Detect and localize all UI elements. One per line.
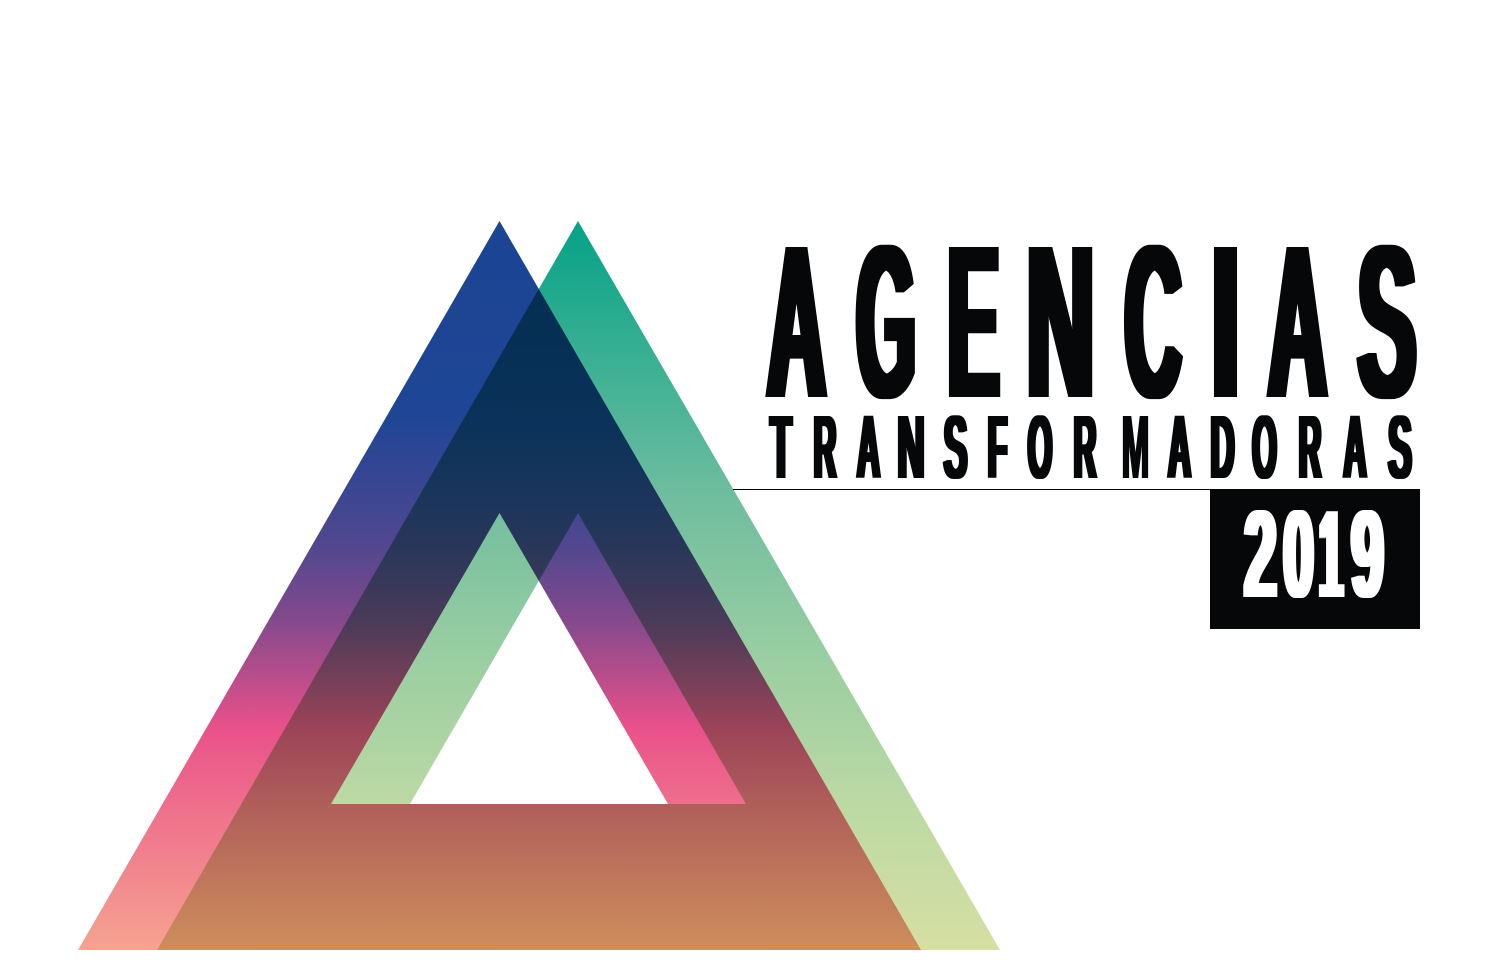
- title: AGENCIAS: E: [948, 200, 999, 444]
- subtitle: TRANSFORMADORAS: A: [857, 398, 880, 498]
- triangle: blue to pink gradient: [78, 221, 921, 950]
- subtitle: TRANSFORMADORAS: R: [814, 398, 836, 498]
- year: 2019: 0: [1283, 485, 1314, 624]
- subtitle: TRANSFORMADORAS: O: [1252, 398, 1277, 498]
- subtitle: TRANSFORMADORAS: [770, 396, 1412, 498]
- title: AGENCIAS: G: [856, 199, 916, 444]
- year badge: [1210, 484, 1420, 629]
- logo: overlapping triangles: [78, 221, 1000, 950]
- title: AGENCIAS: S: [1358, 202, 1416, 444]
- subtitle: TRANSFORMADORAS: O: [1028, 398, 1052, 498]
- year: 2019: 1: [1319, 485, 1343, 624]
- badge background: [1210, 489, 1420, 629]
- subtitle: TRANSFORMADORAS: S: [1388, 396, 1412, 498]
- title: AGENCIAS: N: [1026, 200, 1095, 444]
- subtitle: TRANSFORMADORAS: S: [944, 396, 967, 498]
- subtitle: TRANSFORMADORAS: N: [897, 397, 925, 498]
- subtitle: TRANSFORMADORAS: A: [1168, 398, 1191, 498]
- triangle: green gradient: [157, 221, 1000, 950]
- subtitle: TRANSFORMADORAS: F: [988, 398, 1007, 498]
- year: 2019: [1244, 484, 1384, 624]
- title: AGENCIAS: A: [767, 200, 826, 443]
- divider line: [733, 489, 1210, 490]
- title: AGENCIAS: C: [1125, 200, 1181, 444]
- title: AGENCIAS: A: [1268, 200, 1327, 443]
- subtitle: TRANSFORMADORAS: D: [1210, 398, 1235, 498]
- subtitle: TRANSFORMADORAS: T: [770, 398, 792, 498]
- year: 2019: 2: [1244, 484, 1277, 624]
- title: AGENCIAS: I: [1211, 201, 1240, 444]
- subtitle: TRANSFORMADORAS: R: [1299, 398, 1321, 498]
- title: AGENCIAS: [767, 199, 1416, 444]
- subtitle: TRANSFORMADORAS: R: [1074, 398, 1096, 498]
- subtitle: TRANSFORMADORAS: M: [1122, 398, 1149, 498]
- subtitle: TRANSFORMADORAS: A: [1343, 398, 1367, 498]
- year: 2019: 9: [1351, 484, 1384, 624]
